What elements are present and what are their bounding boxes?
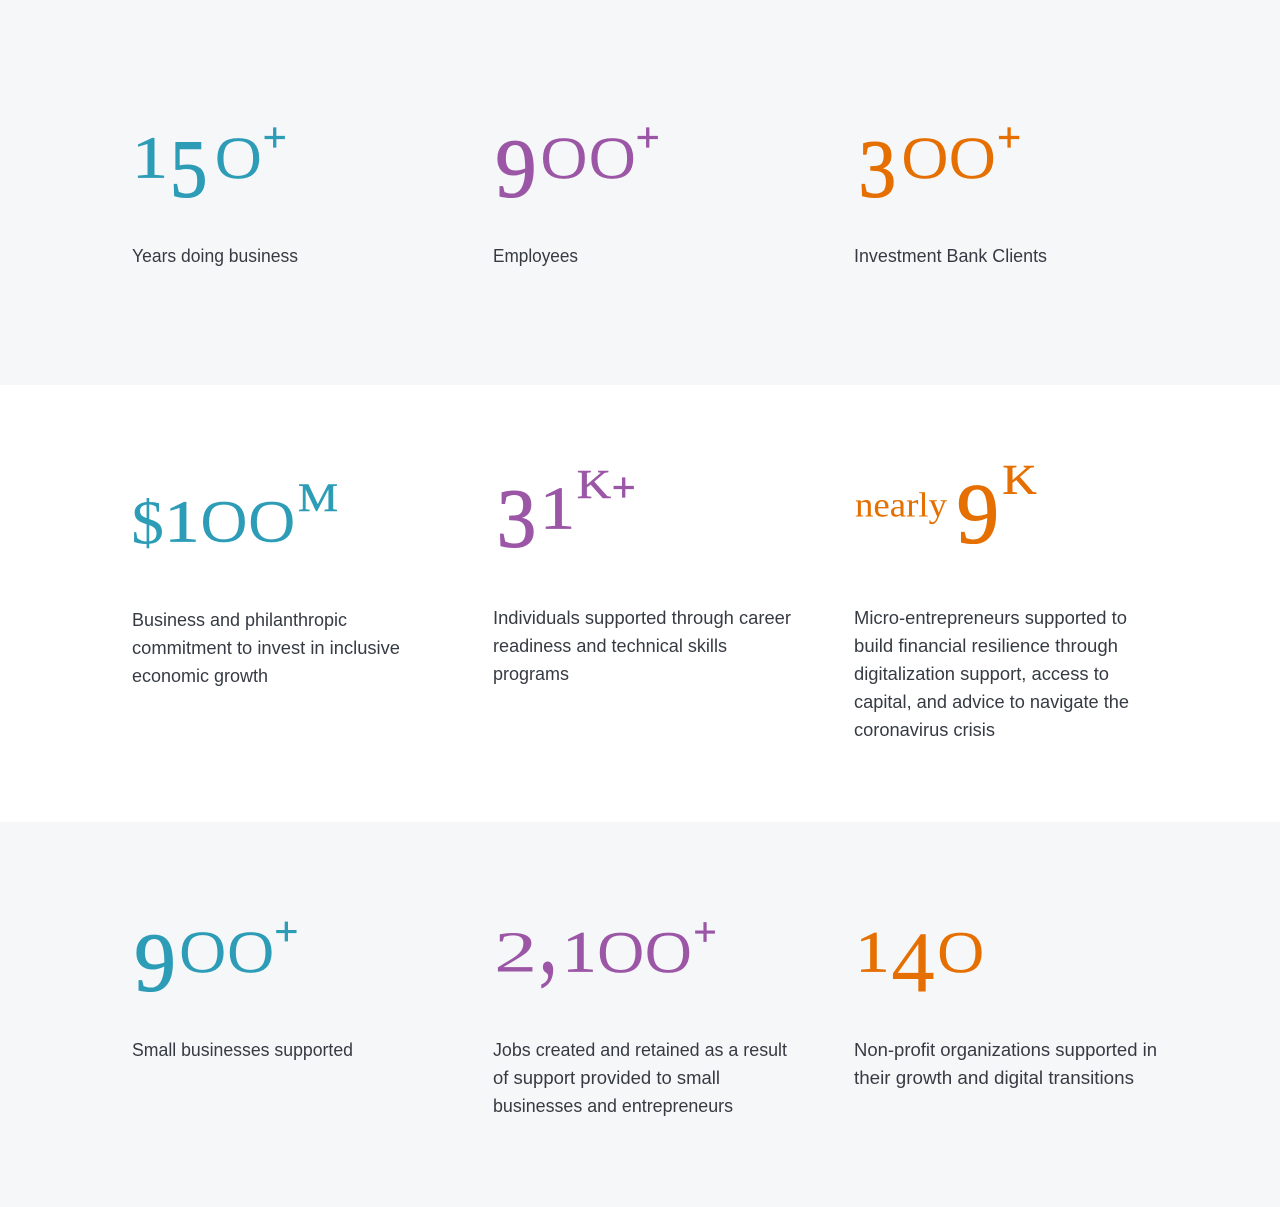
number: 300+: 0 [947, 126, 998, 192]
number: 31K+: 3 [497, 471, 536, 565]
stat: 150+ years [132, 115, 298, 266]
description: jobs created and retained: of support provided to small [493, 1068, 720, 1088]
number: 900+ [134, 909, 298, 1010]
number: nearly 9K: nearly [855, 486, 948, 524]
stat: 140 non-profits [854, 913, 1157, 1088]
description: micro-entrepreneurs supported [854, 608, 1129, 740]
stat: 2,100+ jobs [493, 880, 787, 1116]
number: 2,100+: 1 [562, 919, 596, 985]
number: 900+: 0 [225, 920, 276, 986]
number: 31K+ [497, 461, 635, 565]
description: individuals supported [493, 608, 791, 684]
description: micro-entrepreneurs supported: build financial resilience through [854, 636, 1118, 656]
number: 900+: 0 [538, 126, 590, 192]
number: nearly 9K: 9 [957, 467, 999, 562]
number: 2,100+ [494, 880, 716, 996]
number: 900+ [495, 115, 659, 216]
number: 31K+: K [577, 461, 611, 507]
stat: 31K+ individuals [493, 461, 791, 684]
number: 150+: 5 [170, 124, 207, 215]
stat: nearly 9K micro-entrepreneurs [854, 457, 1129, 740]
description: employees: Employees [493, 246, 578, 266]
number: 140: 1 [856, 919, 889, 985]
description: individuals supported: programs [493, 664, 569, 684]
number: $100M: 0 [246, 490, 297, 555]
description: investment bank clients: Investment Bank Clients [854, 246, 1047, 266]
number: 900+: + [636, 115, 659, 160]
panel: inclusive growth figures [0, 385, 1280, 822]
number: 900+: 9 [134, 917, 176, 1010]
number: 900+: 0 [587, 126, 638, 192]
number: 2,100+: 0 [643, 921, 694, 986]
number: $100M: M [298, 476, 338, 520]
number: $100M [131, 476, 338, 557]
number: 2,100+: 0 [595, 921, 646, 986]
number: 150+: 1 [132, 125, 168, 191]
description: non-profit organizations supported: Non-profit organizations supported in [854, 1040, 1157, 1060]
description: years doing business: Years doing business [132, 246, 298, 266]
description: individuals supported: readiness and technical skills [493, 636, 727, 656]
number: 2,100+: + [694, 910, 716, 954]
panel: small business figures [0, 822, 1280, 1207]
number: 900+: + [275, 909, 298, 953]
number: nearly 9K [855, 457, 1037, 562]
description: business and philanthropic commitment: commitment to invest in inclusive [132, 638, 400, 658]
description: micro-entrepreneurs supported: Micro-entrepreneurs supported to [854, 608, 1127, 628]
description: micro-entrepreneurs supported: capital, and advice to navigate the [854, 692, 1129, 712]
number: 300+: 3 [858, 123, 896, 215]
description: non-profit organizations supported [854, 1040, 1157, 1088]
stat: $100M commitment [131, 476, 400, 686]
number: nearly 9K: K [1002, 457, 1037, 503]
number: 150+ [132, 115, 286, 215]
number: 140: 4 [891, 913, 935, 1010]
number: 140 [856, 913, 986, 1010]
number: 140: 0 [935, 921, 986, 986]
description: non-profit organizations supported: their growth and digital transitions [854, 1068, 1134, 1088]
number: 2,100+: 2 [494, 919, 537, 984]
number: $100M: 0 [198, 490, 250, 555]
description: business and philanthropic commitment [132, 610, 400, 686]
number: 31K+: + [612, 466, 635, 510]
description: business and philanthropic commitment: economic growth [132, 666, 268, 686]
description: individuals supported: Individuals supported through career [493, 608, 791, 628]
stat: 900+ employees [493, 115, 659, 266]
number: 31K+: 1 [540, 476, 575, 542]
number: 150+: + [263, 115, 286, 160]
description: jobs created and retained: businesses and entrepreneurs [493, 1096, 733, 1116]
number: $100M: 1 [164, 489, 200, 555]
panel: company figures [0, 0, 1280, 385]
number: 2,100+: , [538, 880, 558, 996]
description: jobs created and retained: Jobs created and retained as a result [493, 1040, 787, 1060]
number: $100M: $ [131, 488, 164, 557]
description: jobs created and retained [493, 1040, 787, 1116]
number: 300+: + [998, 115, 1021, 160]
number: 300+ [858, 115, 1021, 215]
stat: 900+ small businesses [132, 909, 353, 1060]
stat: 300+ clients [854, 115, 1047, 266]
number: 300+: 0 [899, 126, 951, 192]
description: micro-entrepreneurs supported: digitalization support, access to [854, 664, 1109, 684]
number: 900+: 0 [177, 920, 228, 986]
number: 150+: 0 [213, 126, 264, 192]
number: 900+: 9 [495, 123, 537, 216]
description: business and philanthropic commitment: Business and philanthropic [132, 610, 347, 630]
description: small businesses supported: Small businesses supported [132, 1040, 353, 1060]
description: micro-entrepreneurs supported: coronavirus crisis [854, 720, 995, 740]
